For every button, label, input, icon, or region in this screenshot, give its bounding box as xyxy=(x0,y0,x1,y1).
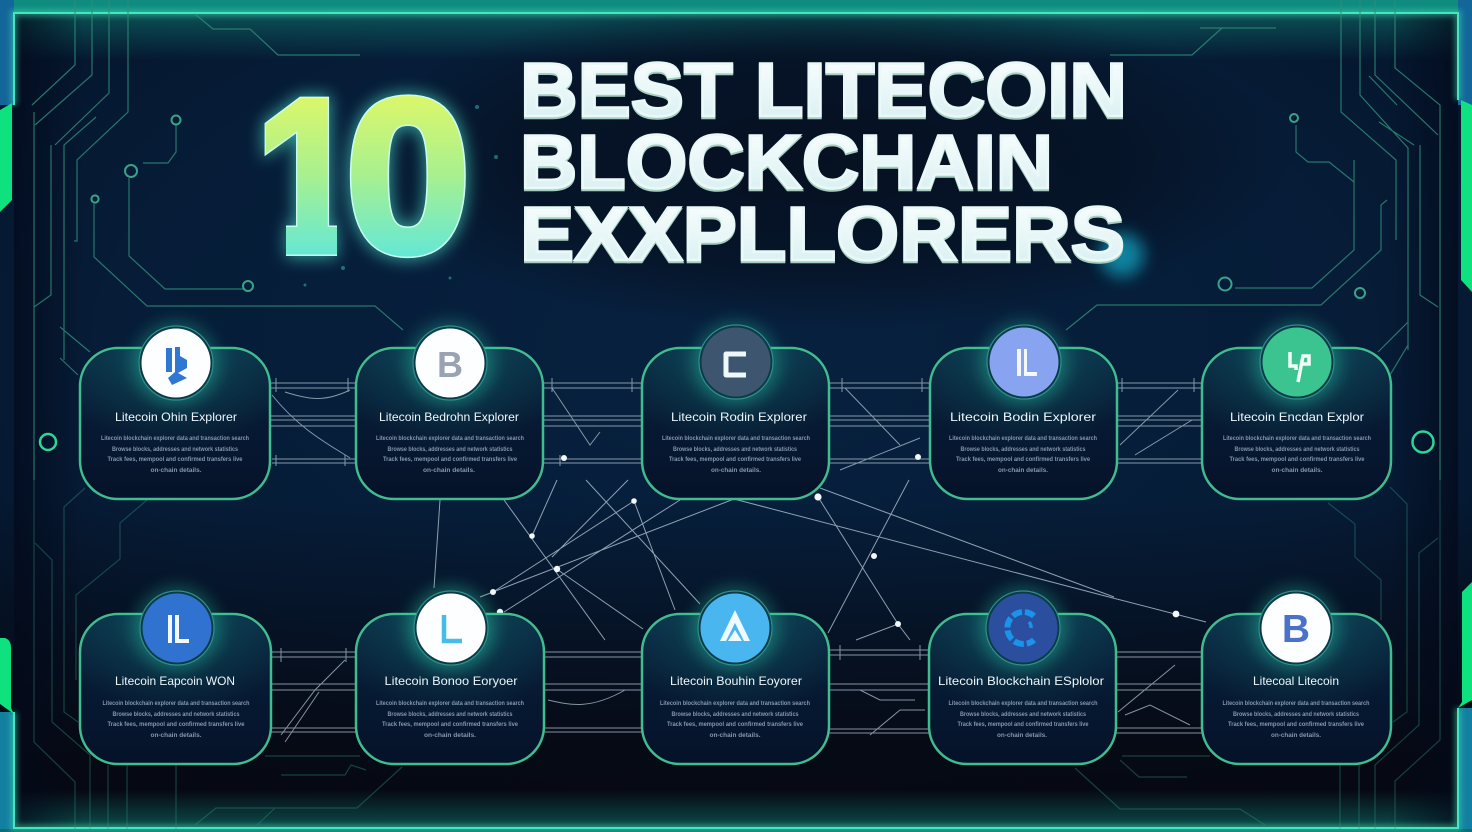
icon: L xyxy=(416,594,486,662)
card 3: top row: Litecoin Rodin Explorer xyxy=(671,410,807,424)
icon: L xyxy=(990,328,1058,396)
title: BEST LITECOIN xyxy=(520,48,1127,133)
card 3: top row: Browse blocks, addresses and network statistics xyxy=(673,446,797,453)
card 10: bottom row: on-chain details. xyxy=(1271,732,1321,739)
card 3: top row: Litecoin blockchain explorer data and transaction search xyxy=(662,435,810,442)
card 10: bottom row: Litecoin blockchain explorer data and transaction search xyxy=(1222,700,1370,707)
icon: B: B xyxy=(1282,608,1310,651)
card 9: bottom row xyxy=(929,586,1116,764)
card 4: top row: Litecoin Bodin Explorer xyxy=(950,410,1096,424)
card 5: top row: Track fees, mempool and confirmed transfers live xyxy=(1230,456,1365,463)
card 8: bottom row: Litecoin Bouhin Eoyorer xyxy=(670,674,802,688)
card 6: bottom row: Litecoin blockchain explorer data and transaction search xyxy=(102,700,250,707)
icon: A xyxy=(700,594,770,662)
card 6: bottom row: Litecoin Eapcoin WON xyxy=(115,674,235,688)
card 1: top row: Browse blocks, addresses and network statistics xyxy=(112,446,238,453)
card 2: top row: on-chain details. xyxy=(423,467,475,474)
particles xyxy=(304,105,498,286)
card 2: top row: Track fees, mempool and confirmed transfers live xyxy=(383,456,517,463)
card 2: top row: Litecoin blockchain explorer data and transaction search xyxy=(376,435,524,442)
card 7: bottom row xyxy=(356,586,544,764)
card 5: top row: on-chain details. xyxy=(1272,467,1323,474)
card 1: top row: Track fees, mempool and confirmed transfers live xyxy=(108,456,243,463)
icon: LF mark xyxy=(1262,328,1332,396)
card 2: top row xyxy=(356,321,543,499)
circuit traces: right xyxy=(1066,0,1440,832)
heading number: 10: 1 xyxy=(255,53,361,299)
card 5: top row: Browse blocks, addresses and network statistics xyxy=(1234,446,1360,453)
card 10: bottom row: Litecoal Litecoin xyxy=(1253,674,1339,688)
card 3: top row: on-chain details. xyxy=(711,467,761,474)
card 1: top row: Litecoin Ohin Explorer xyxy=(115,410,237,424)
card 1: top row: Litecoin blockchain explorer data and transaction search xyxy=(101,435,249,442)
heading number: 10: 0 xyxy=(345,53,471,299)
card 5: top row xyxy=(1202,321,1391,499)
card 6: bottom row: on-chain details. xyxy=(150,732,202,739)
card 7: bottom row: Track fees, mempool and confirmed transfers live xyxy=(382,721,518,728)
card 4: top row: Litecoin blockchain explorer data and transaction search xyxy=(949,435,1097,442)
card 3: top row: Track fees, mempool and confirmed transfers live xyxy=(669,456,801,463)
card 5: top row: Litecoin Encdan Explor xyxy=(1230,410,1364,424)
card 8: bottom row: Litecoin blockchain explorer data and transaction search xyxy=(660,700,810,707)
card 6: bottom row xyxy=(80,586,271,764)
icon: B xyxy=(416,328,484,398)
icon: C xyxy=(702,328,770,396)
card 7: bottom row: Browse blocks, addresses and network statistics xyxy=(388,711,513,718)
card 9: bottom row: Track fees, mempool and confirmed transfers live xyxy=(958,721,1089,728)
icon: blue mark xyxy=(142,328,210,398)
card 7: bottom row: Litecoin blockchain explorer data and transaction search xyxy=(376,700,524,707)
card 7: bottom row: on-chain details. xyxy=(424,732,476,739)
network lines and nodes xyxy=(434,454,1206,640)
card 3: top row xyxy=(642,321,829,499)
card 4: top row: Track fees, mempool and confirmed transfers live xyxy=(956,456,1090,463)
card 8: bottom row xyxy=(642,586,829,764)
heading number: 10 xyxy=(252,82,479,271)
card 10: bottom row xyxy=(1202,586,1391,764)
card 5: top row: Litecoin blockchain explorer data and transaction search xyxy=(1223,435,1371,442)
circuit traces: left xyxy=(32,0,403,832)
title xyxy=(520,48,1144,277)
card 6: bottom row: Track fees, mempool and confirmed transfers live xyxy=(108,721,245,728)
card 4: top row: Browse blocks, addresses and network statistics xyxy=(960,446,1086,453)
heading number: 10: 1 xyxy=(255,53,361,299)
icon: B xyxy=(1262,594,1330,662)
card 9: bottom row: on-chain details. xyxy=(997,732,1047,739)
card 1: top row: on-chain details. xyxy=(150,467,202,474)
card 9: bottom row: Browse blocks, addresses and network statistics xyxy=(960,711,1086,718)
card 4: top row xyxy=(930,321,1117,499)
heading number: 10: 1 xyxy=(255,53,361,299)
connectors between top row cards xyxy=(270,378,1202,470)
card 1: top row xyxy=(80,321,270,499)
icon: IL xyxy=(142,594,212,662)
card 2: top row: Browse blocks, addresses and network statistics xyxy=(388,446,513,453)
card 7: bottom row: Litecoin Bonoo Eoryoer xyxy=(384,674,518,688)
card 9: bottom row: Litecoin Blockchain ESplolor xyxy=(938,674,1104,688)
connectors between bottom row cards xyxy=(271,645,1202,742)
card 2: top row: Litecoin Bedrohn Explorer xyxy=(379,410,519,424)
card 10: bottom row: Track fees, mempool and confirmed transfers live xyxy=(1228,721,1364,728)
heading number: 10: 0 xyxy=(345,53,471,299)
icon: B: B xyxy=(437,344,463,385)
card 9: bottom row: Litecoin blockchain explorer data and transaction search xyxy=(948,700,1098,707)
card 8: bottom row: Track fees, mempool and confirmed transfers live xyxy=(667,721,803,728)
card 10: bottom row: Browse blocks, addresses and network statistics xyxy=(1233,711,1359,718)
card 6: bottom row: Browse blocks, addresses and network statistics xyxy=(112,711,240,718)
title: BLOCKCHAIN xyxy=(520,120,1053,205)
card 8: bottom row: Browse blocks, addresses and network statistics xyxy=(672,711,799,718)
heading number: 10: 0 xyxy=(345,53,471,299)
icon: segmented C xyxy=(988,594,1058,662)
card 4: top row: on-chain details. xyxy=(998,467,1048,474)
title: EXXPLLORERS xyxy=(520,192,1125,277)
card 8: bottom row: on-chain details. xyxy=(710,732,761,739)
